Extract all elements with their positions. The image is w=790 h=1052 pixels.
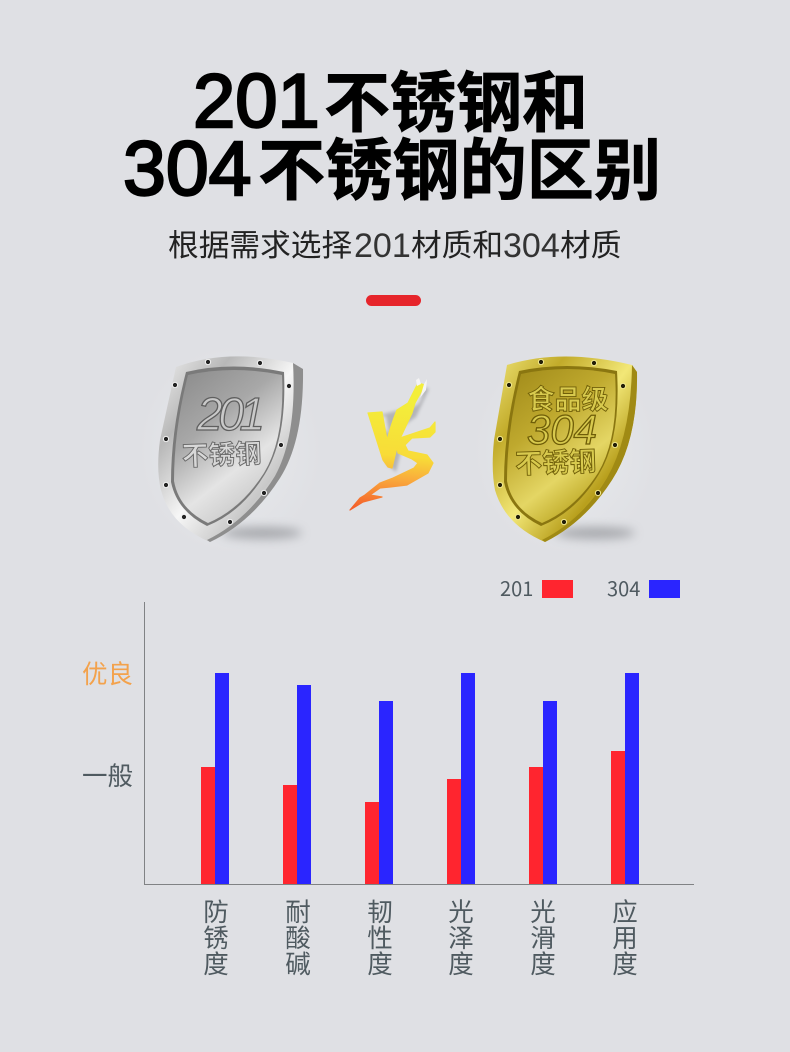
subtitle: 根据需求选择: [168, 220, 352, 265]
letter S: [350, 422, 435, 510]
bars: 光泽度: [447, 673, 475, 884]
title: 不锈钢的区别: [258, 117, 661, 214]
rivets: [497, 359, 626, 525]
x-axis label: 光泽度: 度: [448, 944, 474, 981]
red accent pill: [366, 295, 421, 306]
title: 201: [193, 59, 320, 144]
x-axis label: 防锈度: [203, 892, 229, 981]
x-axis label: 光滑度: 滑: [530, 918, 556, 955]
x-axis label: 耐酸碱: 碱: [285, 944, 311, 981]
bars: 防锈度: [201, 673, 229, 884]
shield text: 食品级: 食品级: [528, 378, 608, 417]
x-axis label: 光滑度: 光: [530, 892, 556, 929]
icon: silver 201 shield: [138, 345, 322, 555]
x-axis label: 耐酸碱: [285, 892, 311, 981]
subtitle: 304: [503, 227, 560, 265]
bars: 应用度: [611, 673, 639, 884]
bar chart: [82, 602, 694, 981]
bars: 韧性度: [365, 701, 393, 884]
x-axis label: 应用度: 应: [612, 892, 638, 929]
icon: gold 304 shield: [473, 345, 657, 555]
x-axis label: 光泽度: 光: [448, 892, 474, 929]
x-axis label: 光滑度: 度: [530, 944, 556, 981]
x-axis label: 防锈度: 度: [203, 944, 229, 981]
x-axis label: 韧性度: 性: [367, 918, 393, 955]
letter V: [368, 383, 425, 468]
subtitle: 材质: [560, 220, 621, 265]
title: 304: [123, 126, 251, 212]
x-axis label: 韧性度: 度: [367, 944, 393, 981]
subtitle: 材质和: [411, 220, 503, 265]
x-axis label: 应用度: 度: [612, 944, 638, 981]
x-axis label: 应用度: 用: [612, 918, 638, 955]
x-axis label: 光泽度: [448, 892, 474, 981]
shield text: 201: 201: [196, 388, 265, 440]
legend item: 304: [607, 573, 680, 602]
x-axis label: 耐酸碱: 耐: [285, 892, 311, 929]
x-axis label: 防锈度: 锈: [203, 918, 229, 955]
y-axis label: 一般: 一般: [82, 756, 133, 793]
bars: 光滑度: [529, 701, 557, 884]
x-axis label: 光滑度: [530, 892, 556, 981]
y-axis label: 优良: 优良: [82, 654, 133, 691]
x-axis label: 光泽度: 泽: [448, 918, 474, 955]
rivets: [163, 359, 292, 525]
x-axis label: 防锈度: 防: [203, 892, 229, 929]
legend: [500, 573, 680, 602]
title: 不锈钢和: [324, 50, 588, 146]
subtitle: [168, 220, 621, 265]
x-axis label: 韧性度: 韧: [367, 892, 393, 929]
title: [123, 50, 661, 214]
x-axis label: 应用度: [612, 892, 638, 981]
bars: 耐酸碱: [283, 685, 311, 884]
legend item: 201: [500, 573, 573, 602]
legend item: 304: 304: [607, 573, 640, 602]
shield text: 304: 304: [527, 406, 597, 453]
legend item: 201: 201: [500, 573, 533, 602]
shield text: 不锈钢: 不锈钢: [181, 432, 262, 473]
subtitle: 201: [354, 227, 411, 265]
icon: VS emblem: [350, 378, 435, 510]
shield text: 不锈钢: 不锈钢: [514, 440, 597, 481]
spark: [416, 378, 427, 398]
x-axis label: 韧性度: [367, 892, 393, 981]
x-axis label: 耐酸碱: 酸: [285, 918, 311, 955]
